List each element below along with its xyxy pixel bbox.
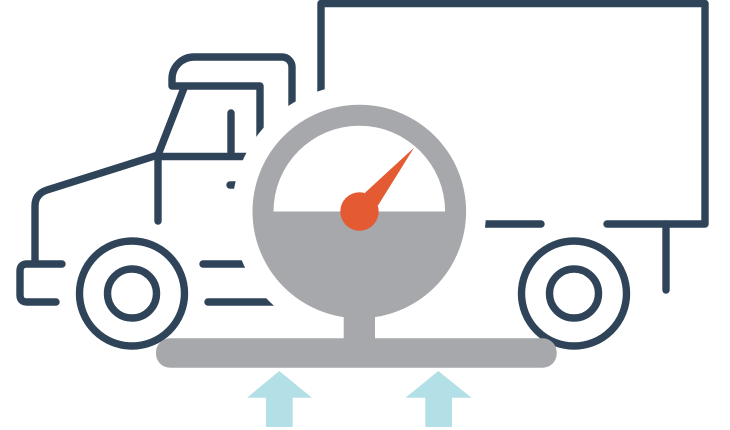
- arrow: left upward air flow: [247, 371, 312, 427]
- needle hub: [340, 192, 379, 231]
- icon: truck outline: [20, 4, 705, 346]
- windshield and hood: [35, 88, 184, 263]
- rear support leg: [662, 224, 670, 290]
- side window sill: [158, 153, 260, 160]
- chassis lines: [203, 264, 300, 302]
- gauge needle: [340, 148, 414, 231]
- door handle: [230, 181, 250, 189]
- window divider: [227, 113, 235, 156]
- pressure pipe bar: [156, 338, 557, 368]
- front bumper: [20, 264, 62, 302]
- front wheel: [80, 241, 184, 346]
- door edge: [154, 156, 162, 221]
- arrow: right upward air flow: [406, 371, 472, 427]
- cab roof: [172, 57, 292, 150]
- icon: pressure gauge: [252, 105, 466, 345]
- gauge stem: [344, 310, 375, 345]
- gauge white halo: [232, 84, 486, 338]
- gauge body: [252, 105, 466, 318]
- needle pointer: [365, 148, 414, 206]
- truck cargo box: [321, 4, 705, 224]
- gauge dial face: [274, 126, 445, 212]
- rear wheel: [522, 241, 626, 346]
